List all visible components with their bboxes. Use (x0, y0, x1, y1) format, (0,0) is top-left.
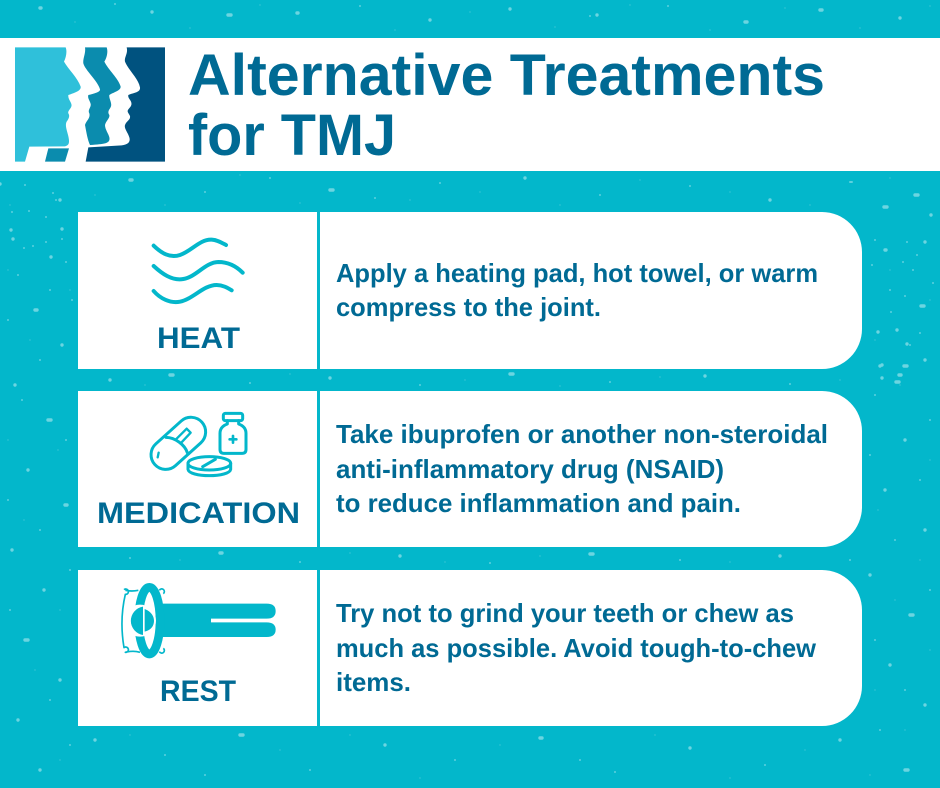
title text (188, 43, 825, 168)
heading: heat: HEAT (157, 322, 240, 355)
icon: heat waves (154, 240, 243, 302)
text: heat description: Apply a heating pad, hot towel, or warm (336, 258, 818, 288)
text: medication description: anti-inflammatory drug (NSAID) (336, 454, 724, 484)
heading: medication: MEDICATION (97, 497, 300, 530)
text: heat description (336, 258, 818, 322)
panel: medication (78, 391, 862, 547)
text: rest description: Try not to grind your teeth or chew as (336, 598, 794, 628)
text: medication description: to reduce inflammation and pain. (336, 488, 741, 518)
text: medication description: Take ibuprofen or another non-steroidal (336, 419, 828, 449)
panel: rest (78, 570, 862, 726)
logo: three face profiles (15, 47, 165, 162)
text: rest description: much as possible. Avoid tough-to-chew (336, 633, 817, 663)
title text: Alternative Treatments (188, 43, 825, 108)
heading: rest: REST (160, 675, 236, 708)
title text: for TMJ (188, 103, 396, 168)
panel: heat (78, 212, 862, 369)
text: rest description: items. (336, 667, 411, 697)
title banner (0, 38, 940, 171)
text: heat description: compress to the joint. (336, 292, 601, 322)
icon: pills and bottle (145, 411, 246, 476)
text: rest description (336, 598, 817, 697)
text: medication description (336, 419, 828, 518)
icon: person resting on pillow (122, 587, 276, 654)
